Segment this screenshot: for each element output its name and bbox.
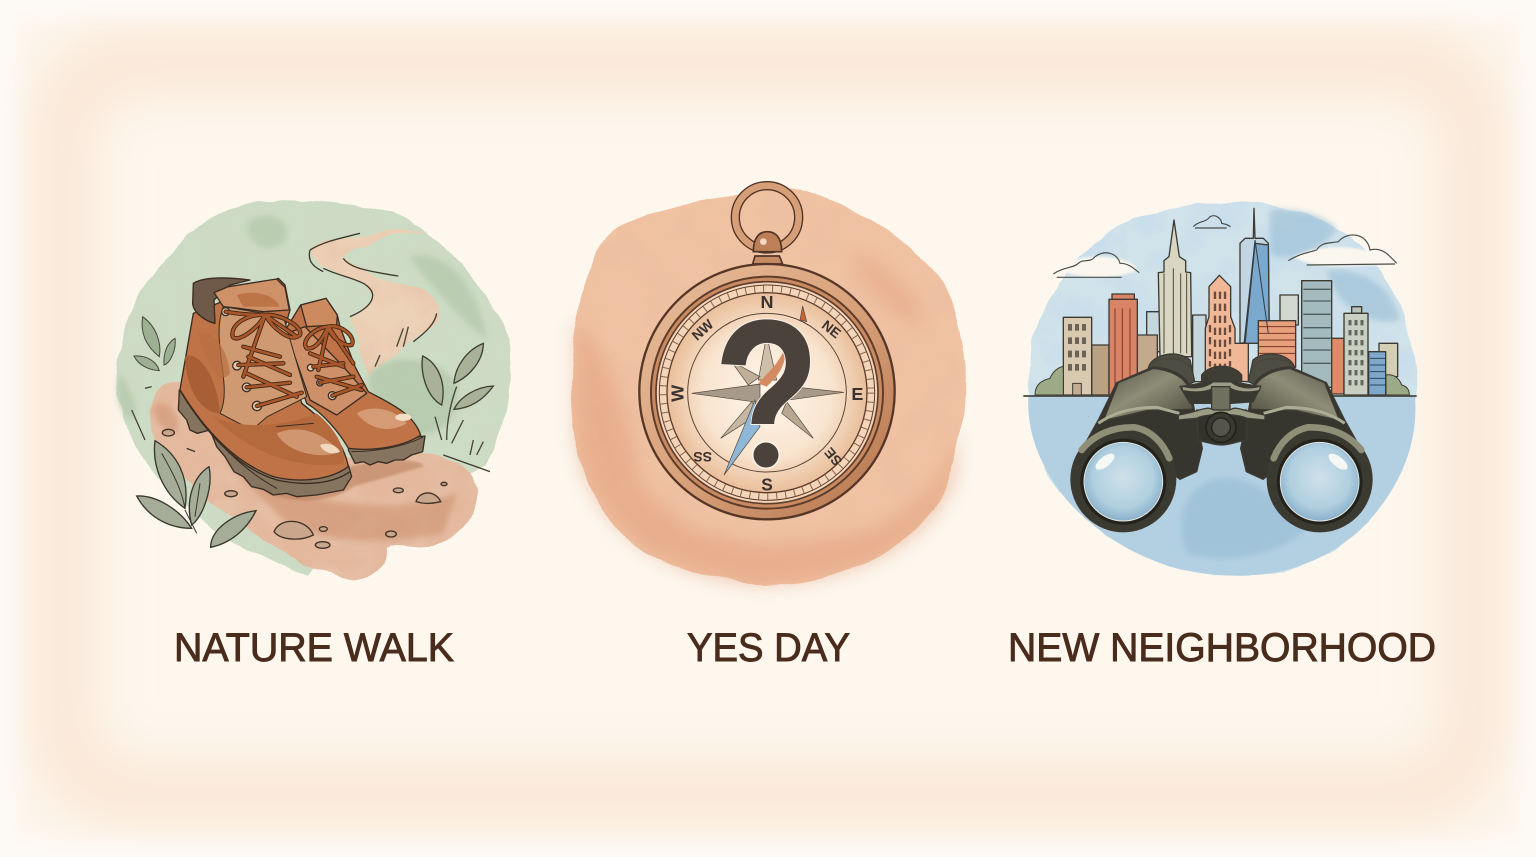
icon: binoculars over city skyline (1023, 202, 1417, 576)
front boot (178, 278, 352, 497)
label: new neighborhood: NEW NEIGHBORHOOD (1008, 626, 1436, 670)
back boot (283, 298, 425, 465)
compass letters: SE (821, 445, 845, 469)
building windows and lines (1070, 240, 1385, 390)
compass letters (667, 292, 863, 495)
compass letters: SS (693, 449, 712, 465)
icon: watercolor wash behind compass (571, 192, 965, 585)
label: nature walk: NATURE WALK (174, 626, 454, 670)
icon: hiking boots on a trail (115, 201, 510, 579)
compass rose (692, 306, 844, 475)
panel: new neighborhood (1008, 202, 1436, 670)
compass letters: E (851, 384, 863, 404)
compass letters: W (667, 385, 687, 402)
shadow under boots (243, 460, 423, 501)
question mark: ? (713, 276, 820, 514)
compass letters: S (761, 475, 773, 495)
compass letters: NW (688, 315, 717, 343)
rocks (162, 429, 447, 548)
skyline buildings (1035, 208, 1409, 395)
panel: nature walk (115, 201, 510, 670)
compass ring and crown (735, 186, 799, 264)
label: yes day: YES DAY (687, 626, 850, 670)
plants (132, 317, 493, 547)
compass letters: NE (819, 317, 844, 341)
sky and water wash (1028, 202, 1415, 576)
horizon line (1023, 393, 1417, 398)
icon: compass with question mark (639, 186, 895, 519)
question mark (720, 318, 811, 470)
clouds (1053, 216, 1397, 277)
binoculars (1071, 354, 1372, 532)
compass letters: N (760, 292, 773, 312)
laces and eyelets (222, 308, 362, 411)
compass case (639, 264, 895, 519)
panel: yes day (571, 186, 965, 670)
